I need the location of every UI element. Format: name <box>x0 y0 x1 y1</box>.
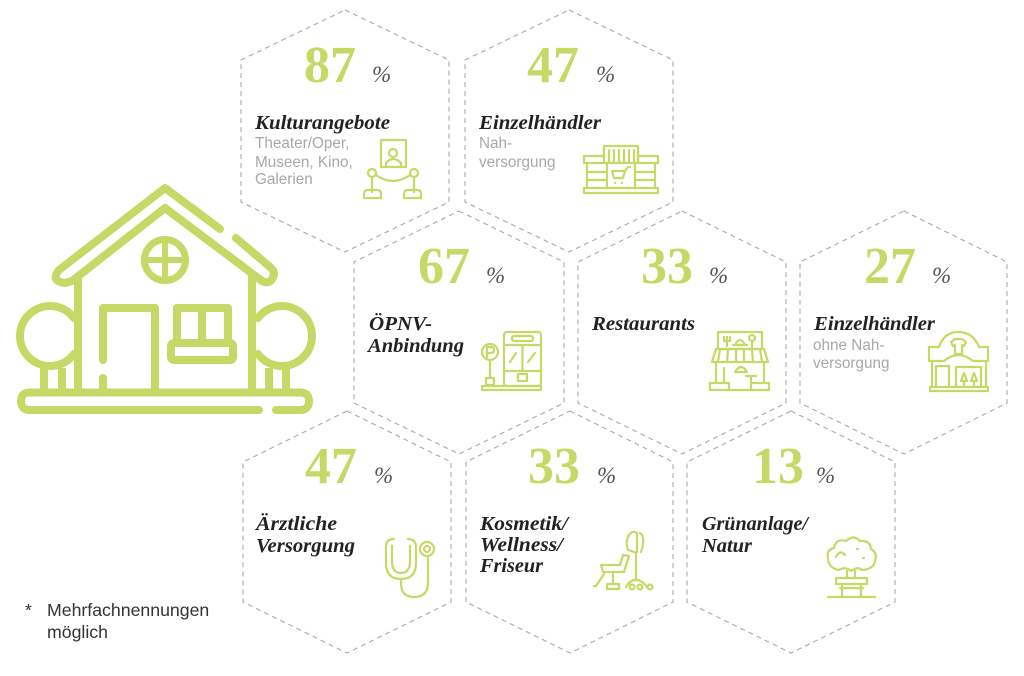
icon: tree and bench <box>828 538 876 597</box>
number 87: 87 <box>304 37 356 94</box>
percent sign: % <box>372 62 391 87</box>
panel: Einzelhändler Nahversorgung <box>465 10 673 252</box>
number 47: 47 <box>527 37 579 94</box>
heading: Ärztliche <box>254 512 337 535</box>
footnote: * <box>25 600 32 620</box>
percent sign: % <box>932 263 951 288</box>
description: Theater/Oper, <box>255 135 349 152</box>
percent sign: % <box>816 463 835 488</box>
heading <box>366 312 464 357</box>
heading: Natur <box>701 535 752 557</box>
icon: restaurant front <box>710 332 769 390</box>
number 33: 33 <box>528 438 580 495</box>
number 67: 67 <box>418 238 470 295</box>
description: Galerien <box>255 171 313 188</box>
heading: Einzelhändler <box>813 313 935 335</box>
heading: ÖPNV- <box>369 312 432 335</box>
heading: Restaurants <box>591 313 695 335</box>
icon: clothing store <box>929 332 988 391</box>
percent sign: % <box>374 463 393 488</box>
heading: Kulturangebote <box>254 112 390 134</box>
icon: stethoscope <box>386 539 434 597</box>
panel: Restaurants <box>578 211 786 454</box>
description: versorgung <box>479 154 556 171</box>
icon: bus stop <box>482 332 541 390</box>
icon: salon chair with hood dryer <box>594 532 652 590</box>
icon: house with trees <box>20 188 312 410</box>
number 47: 47 <box>305 438 357 495</box>
percent sign: % <box>596 62 615 87</box>
percent sign: % <box>597 463 616 488</box>
panel: Kulturangebote <box>241 10 449 252</box>
panel: Kosmetik Wellness Friseur <box>466 411 673 653</box>
heading <box>479 513 571 577</box>
description: versorgung <box>813 355 890 372</box>
icon: supermarket with cart <box>584 146 658 193</box>
number 13: 13 <box>752 438 804 495</box>
heading: Friseur <box>479 555 543 577</box>
footnote: möglich <box>47 622 108 642</box>
heading: Versorgung <box>256 535 355 557</box>
percent sign: % <box>709 263 728 288</box>
panel: Ärztliche Versorgung <box>243 411 451 653</box>
heading <box>701 513 810 557</box>
icon: framed picture with rope barrier <box>364 140 421 198</box>
panel: Einzelhändler ohne Nahversorgung <box>800 211 1007 454</box>
footnote: Mehrfachnennungen <box>47 600 209 620</box>
heading: Wellness/ <box>480 534 566 556</box>
heading: Einzelhändler <box>478 112 601 134</box>
number 27: 27 <box>864 238 916 295</box>
description: Nah- <box>479 135 512 152</box>
description: Museen, Kino, <box>255 154 353 171</box>
description: ohne Nah- <box>813 337 884 354</box>
heading <box>254 512 355 557</box>
heading: Kosmetik/ <box>479 513 571 535</box>
percent sign: % <box>486 263 505 288</box>
panel: ÖPNV-Anbindung <box>354 211 564 454</box>
number 33: 33 <box>641 238 693 295</box>
heading: Anbindung <box>366 335 464 357</box>
heading: Grünanlage/ <box>702 513 810 535</box>
panel: Grünanlage Natur <box>687 411 895 653</box>
